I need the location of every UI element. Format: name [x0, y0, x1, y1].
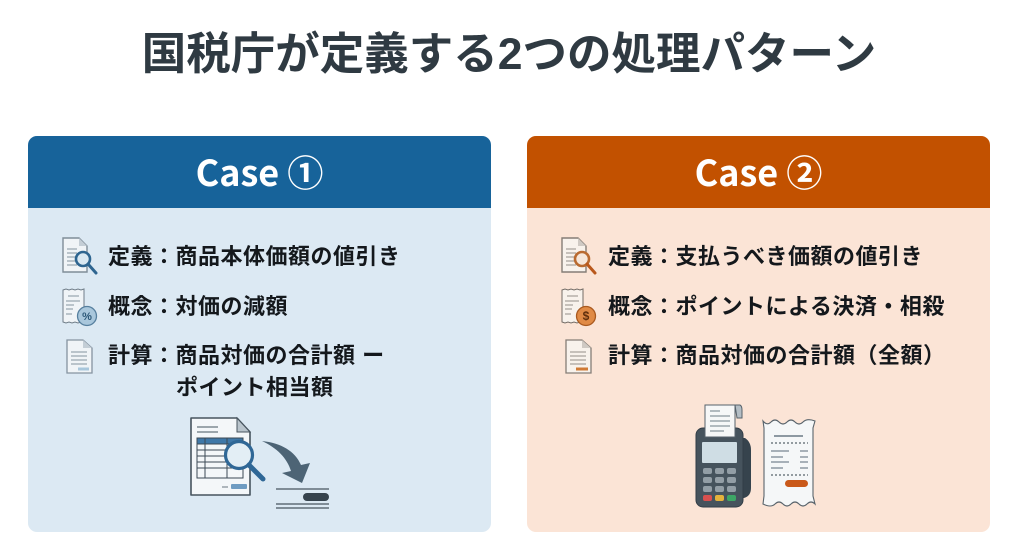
case 2 header: [527, 136, 990, 208]
icon: receipt with dollar coin: [562, 288, 596, 326]
concept text: 概念：対価の減額: [108, 294, 288, 319]
panel: case 1: [28, 136, 491, 532]
case 1 header: [28, 136, 491, 208]
case 2 header: Case ②: [695, 145, 822, 197]
icon: concept receipt with percent badge: %: [82, 311, 92, 323]
icon: concept receipt with percent badge: [62, 288, 98, 326]
calculation text: 計算：商品対価の合計額 ー: [108, 343, 385, 368]
icon: calculation document: [66, 339, 93, 374]
definition text: 定義：支払うべき価額の値引き: [608, 244, 923, 269]
icon: definition document with magnifier: [62, 237, 98, 275]
calculation text: ポイント相当額: [176, 375, 334, 400]
illustration: card terminal and receipt: [696, 404, 816, 508]
definition text: 定義：商品本体価額の値引き: [108, 244, 401, 269]
icon: receipt with dollar coin: $: [583, 309, 590, 323]
illustration: invoice with magnifier and discount arrow: [190, 416, 329, 509]
case 1 header: Case ①: [196, 145, 323, 197]
panel: case 2: [527, 136, 990, 532]
icon: definition document with orange magnifier: [561, 237, 597, 275]
calculation text: 計算：商品対価の合計額（全額）: [608, 343, 946, 368]
calculation text: [108, 343, 385, 400]
icon: calculation document with total bar: [565, 339, 592, 374]
title: 国税庁が定義する2つの処理パターン: [142, 30, 876, 79]
concept text: 概念：ポイントによる決済・相殺: [608, 294, 945, 319]
